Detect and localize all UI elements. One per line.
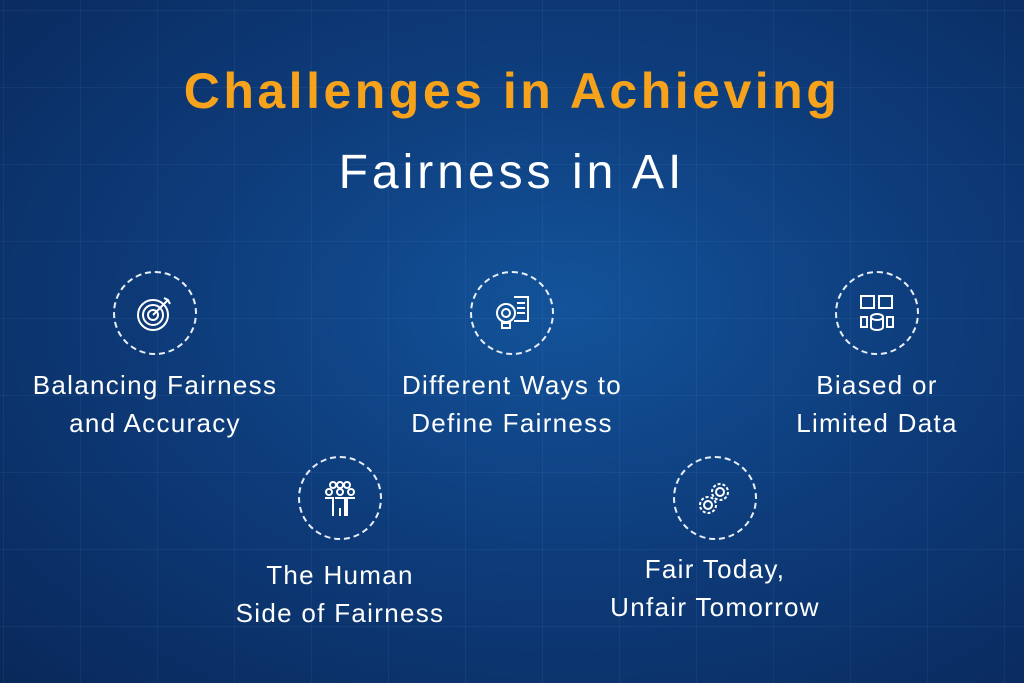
icon: bulb and document [470, 271, 554, 355]
icon: target [113, 271, 197, 355]
text: balancing: and Accuracy [69, 408, 241, 438]
text: human side [236, 560, 444, 628]
text: human side: The Human [266, 560, 414, 590]
title: Challenges in Achieving [184, 63, 840, 119]
text: different ways [402, 370, 622, 438]
text: human side: Side of Fairness [236, 598, 444, 628]
text: balancing: Balancing Fairness [33, 370, 277, 400]
text: biased data [796, 370, 958, 438]
text: fair today [610, 554, 820, 622]
text: balancing [33, 370, 277, 438]
text: fair today: Fair Today, [645, 554, 785, 584]
icon: data [835, 271, 919, 355]
text: biased data: Biased or [816, 370, 938, 400]
text: different ways: Different Ways to [402, 370, 622, 400]
text: different ways: Define Fairness [411, 408, 613, 438]
text: fair today: Unfair Tomorrow [610, 592, 820, 622]
icon: gears [673, 456, 757, 540]
text: biased data: Limited Data [796, 408, 958, 438]
icon: people [298, 456, 382, 540]
subtitle: Fairness in AI [339, 146, 685, 199]
